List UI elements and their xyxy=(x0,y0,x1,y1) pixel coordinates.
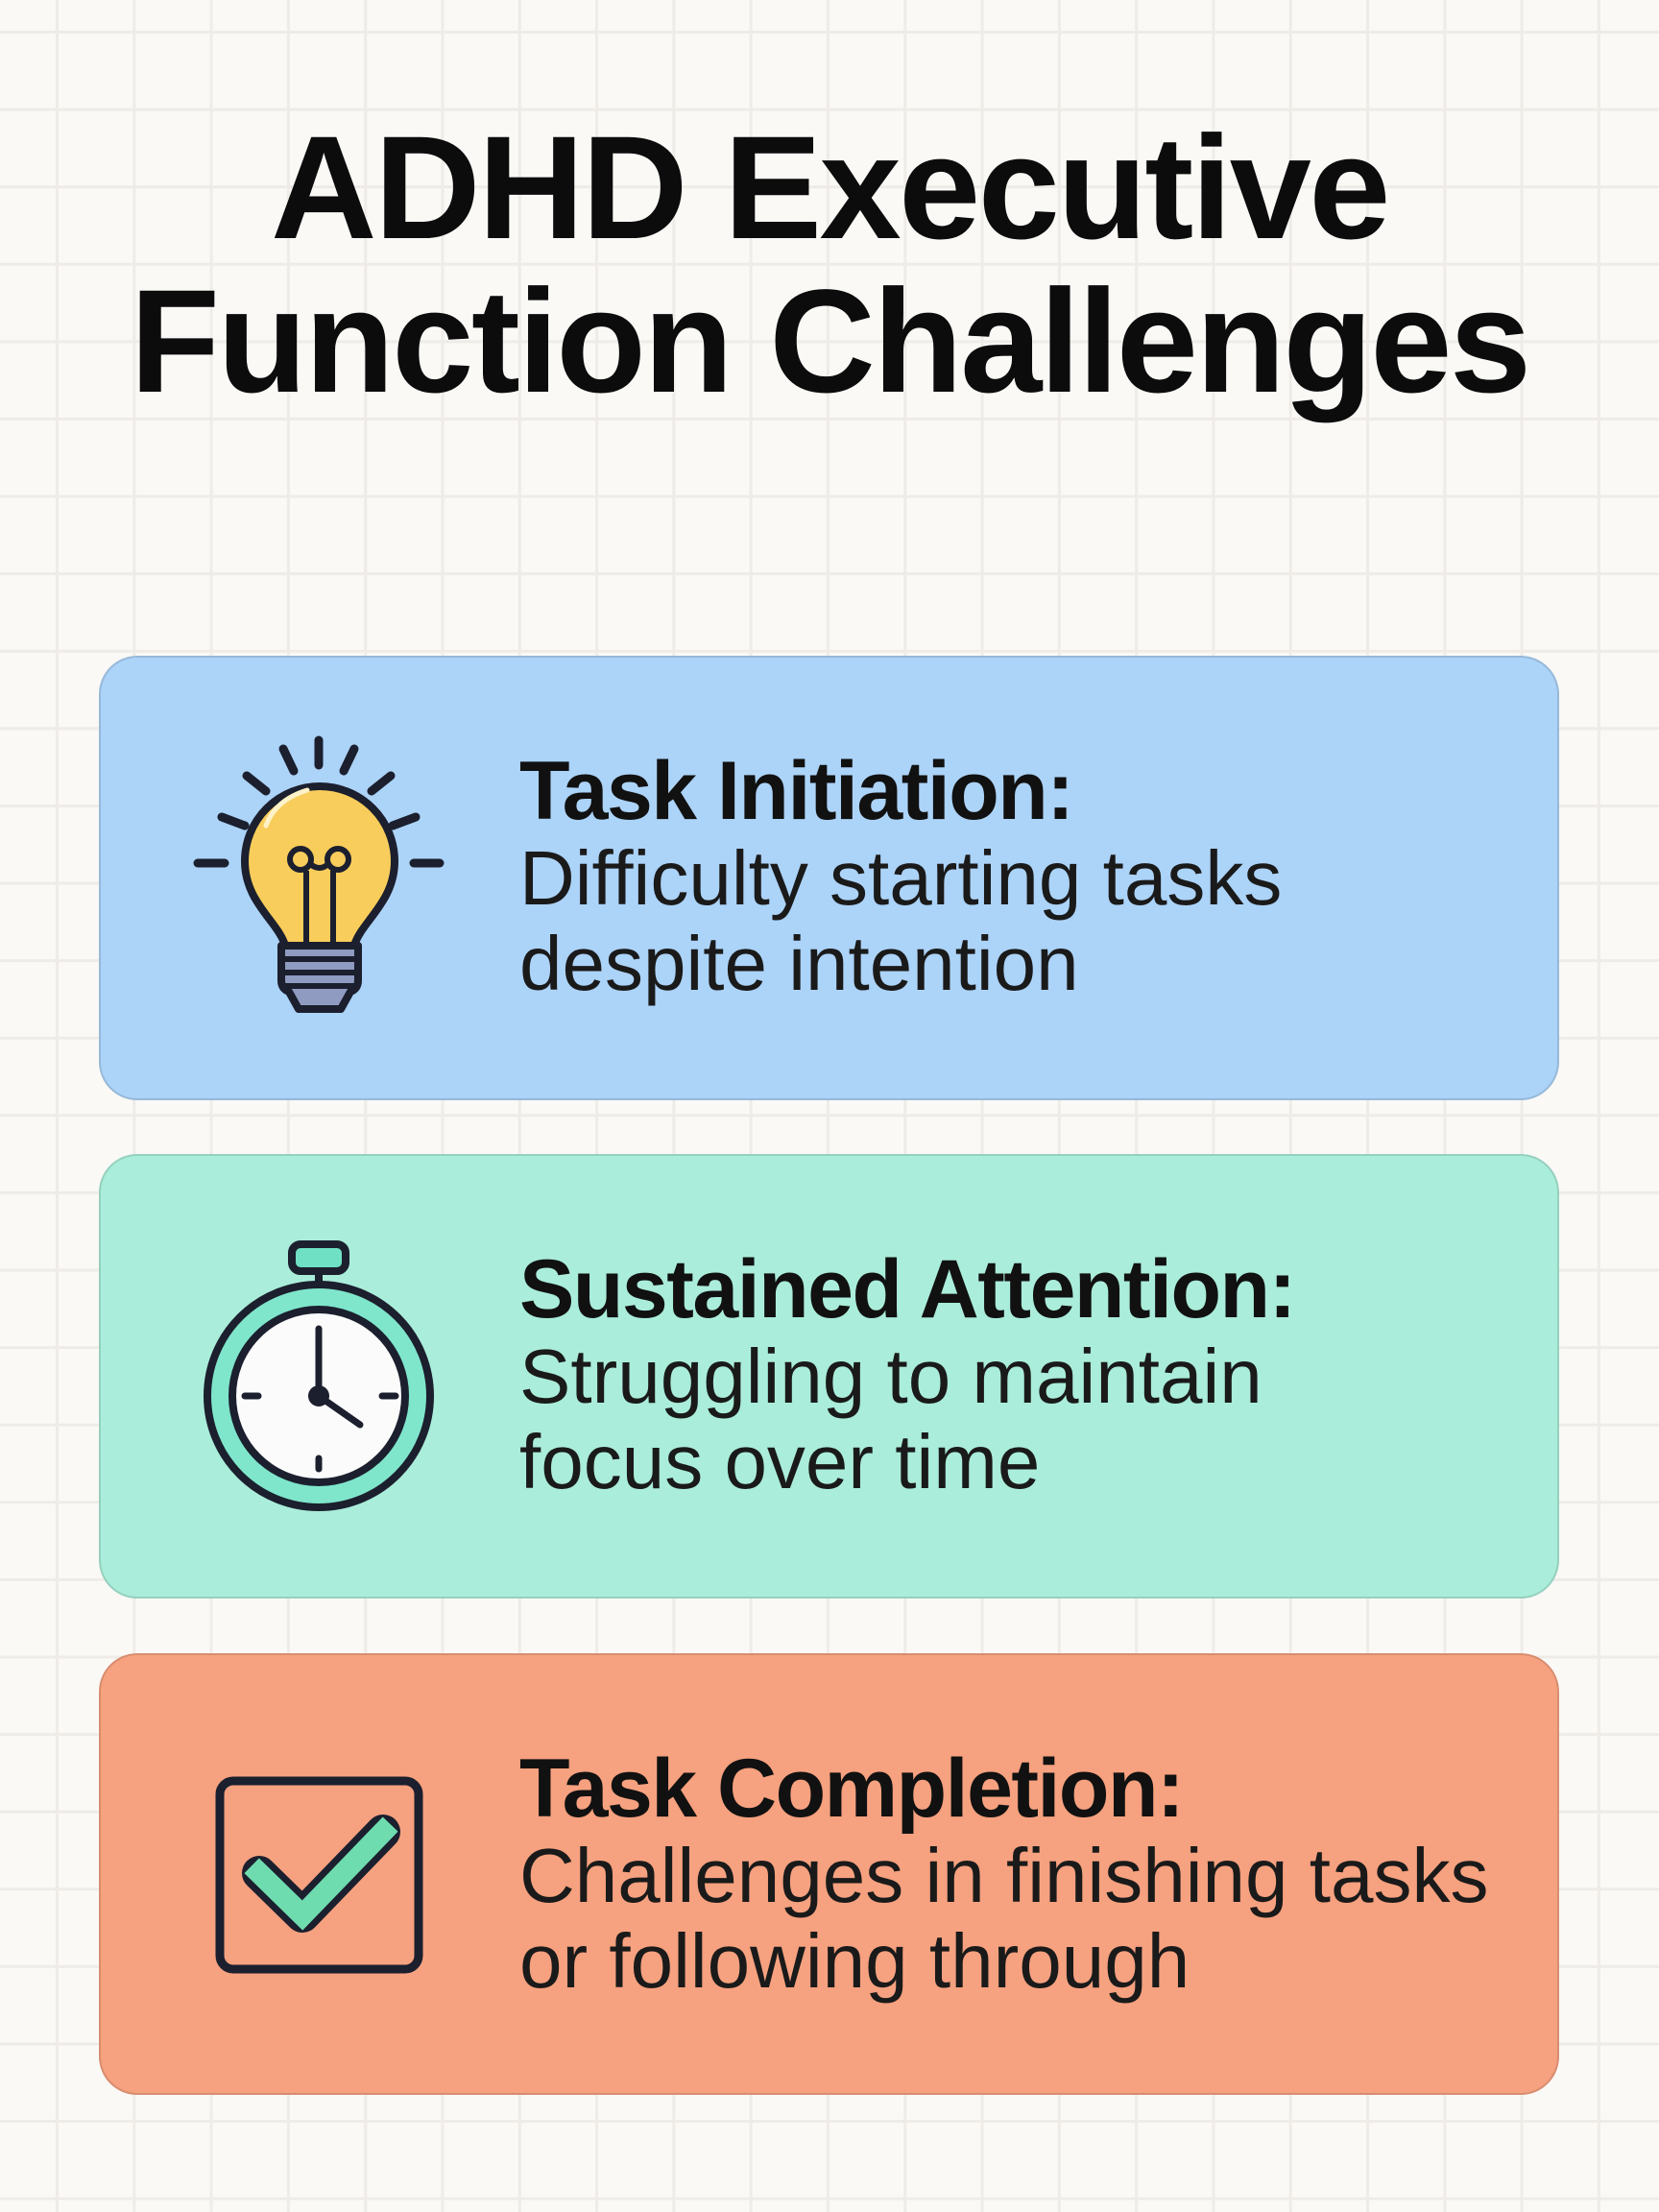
text: sustained attention xyxy=(519,1243,1295,1504)
text: sustained attention: Sustained Attention: xyxy=(519,1243,1295,1335)
text: sustained attention: focus over time xyxy=(519,1419,1040,1504)
text: task completion: Challenges in finishing tasks xyxy=(519,1833,1488,1918)
text: sustained attention: Struggling to maintain xyxy=(519,1334,1262,1419)
panel: task completion xyxy=(99,1653,1559,2095)
title: ADHD Executive xyxy=(271,106,1388,270)
text: task initiation: despite intention xyxy=(519,921,1079,1006)
text: task initiation: Difficulty starting tasks xyxy=(519,835,1282,921)
panel: sustained attention xyxy=(99,1154,1559,1599)
icon: light bulb xyxy=(194,735,444,1013)
text: task initiation xyxy=(519,745,1282,1006)
icon: checkbox xyxy=(215,1776,422,1974)
text: task initiation: Task Initiation: xyxy=(519,745,1072,837)
text: task completion xyxy=(519,1743,1488,2004)
title: Function Challenges xyxy=(130,259,1529,423)
title xyxy=(130,106,1529,423)
panel: task initiation xyxy=(99,656,1559,1100)
text: task completion: or following through xyxy=(519,1918,1190,2004)
icon: stopwatch xyxy=(204,1240,434,1511)
text: task completion: Task Completion: xyxy=(519,1743,1183,1835)
